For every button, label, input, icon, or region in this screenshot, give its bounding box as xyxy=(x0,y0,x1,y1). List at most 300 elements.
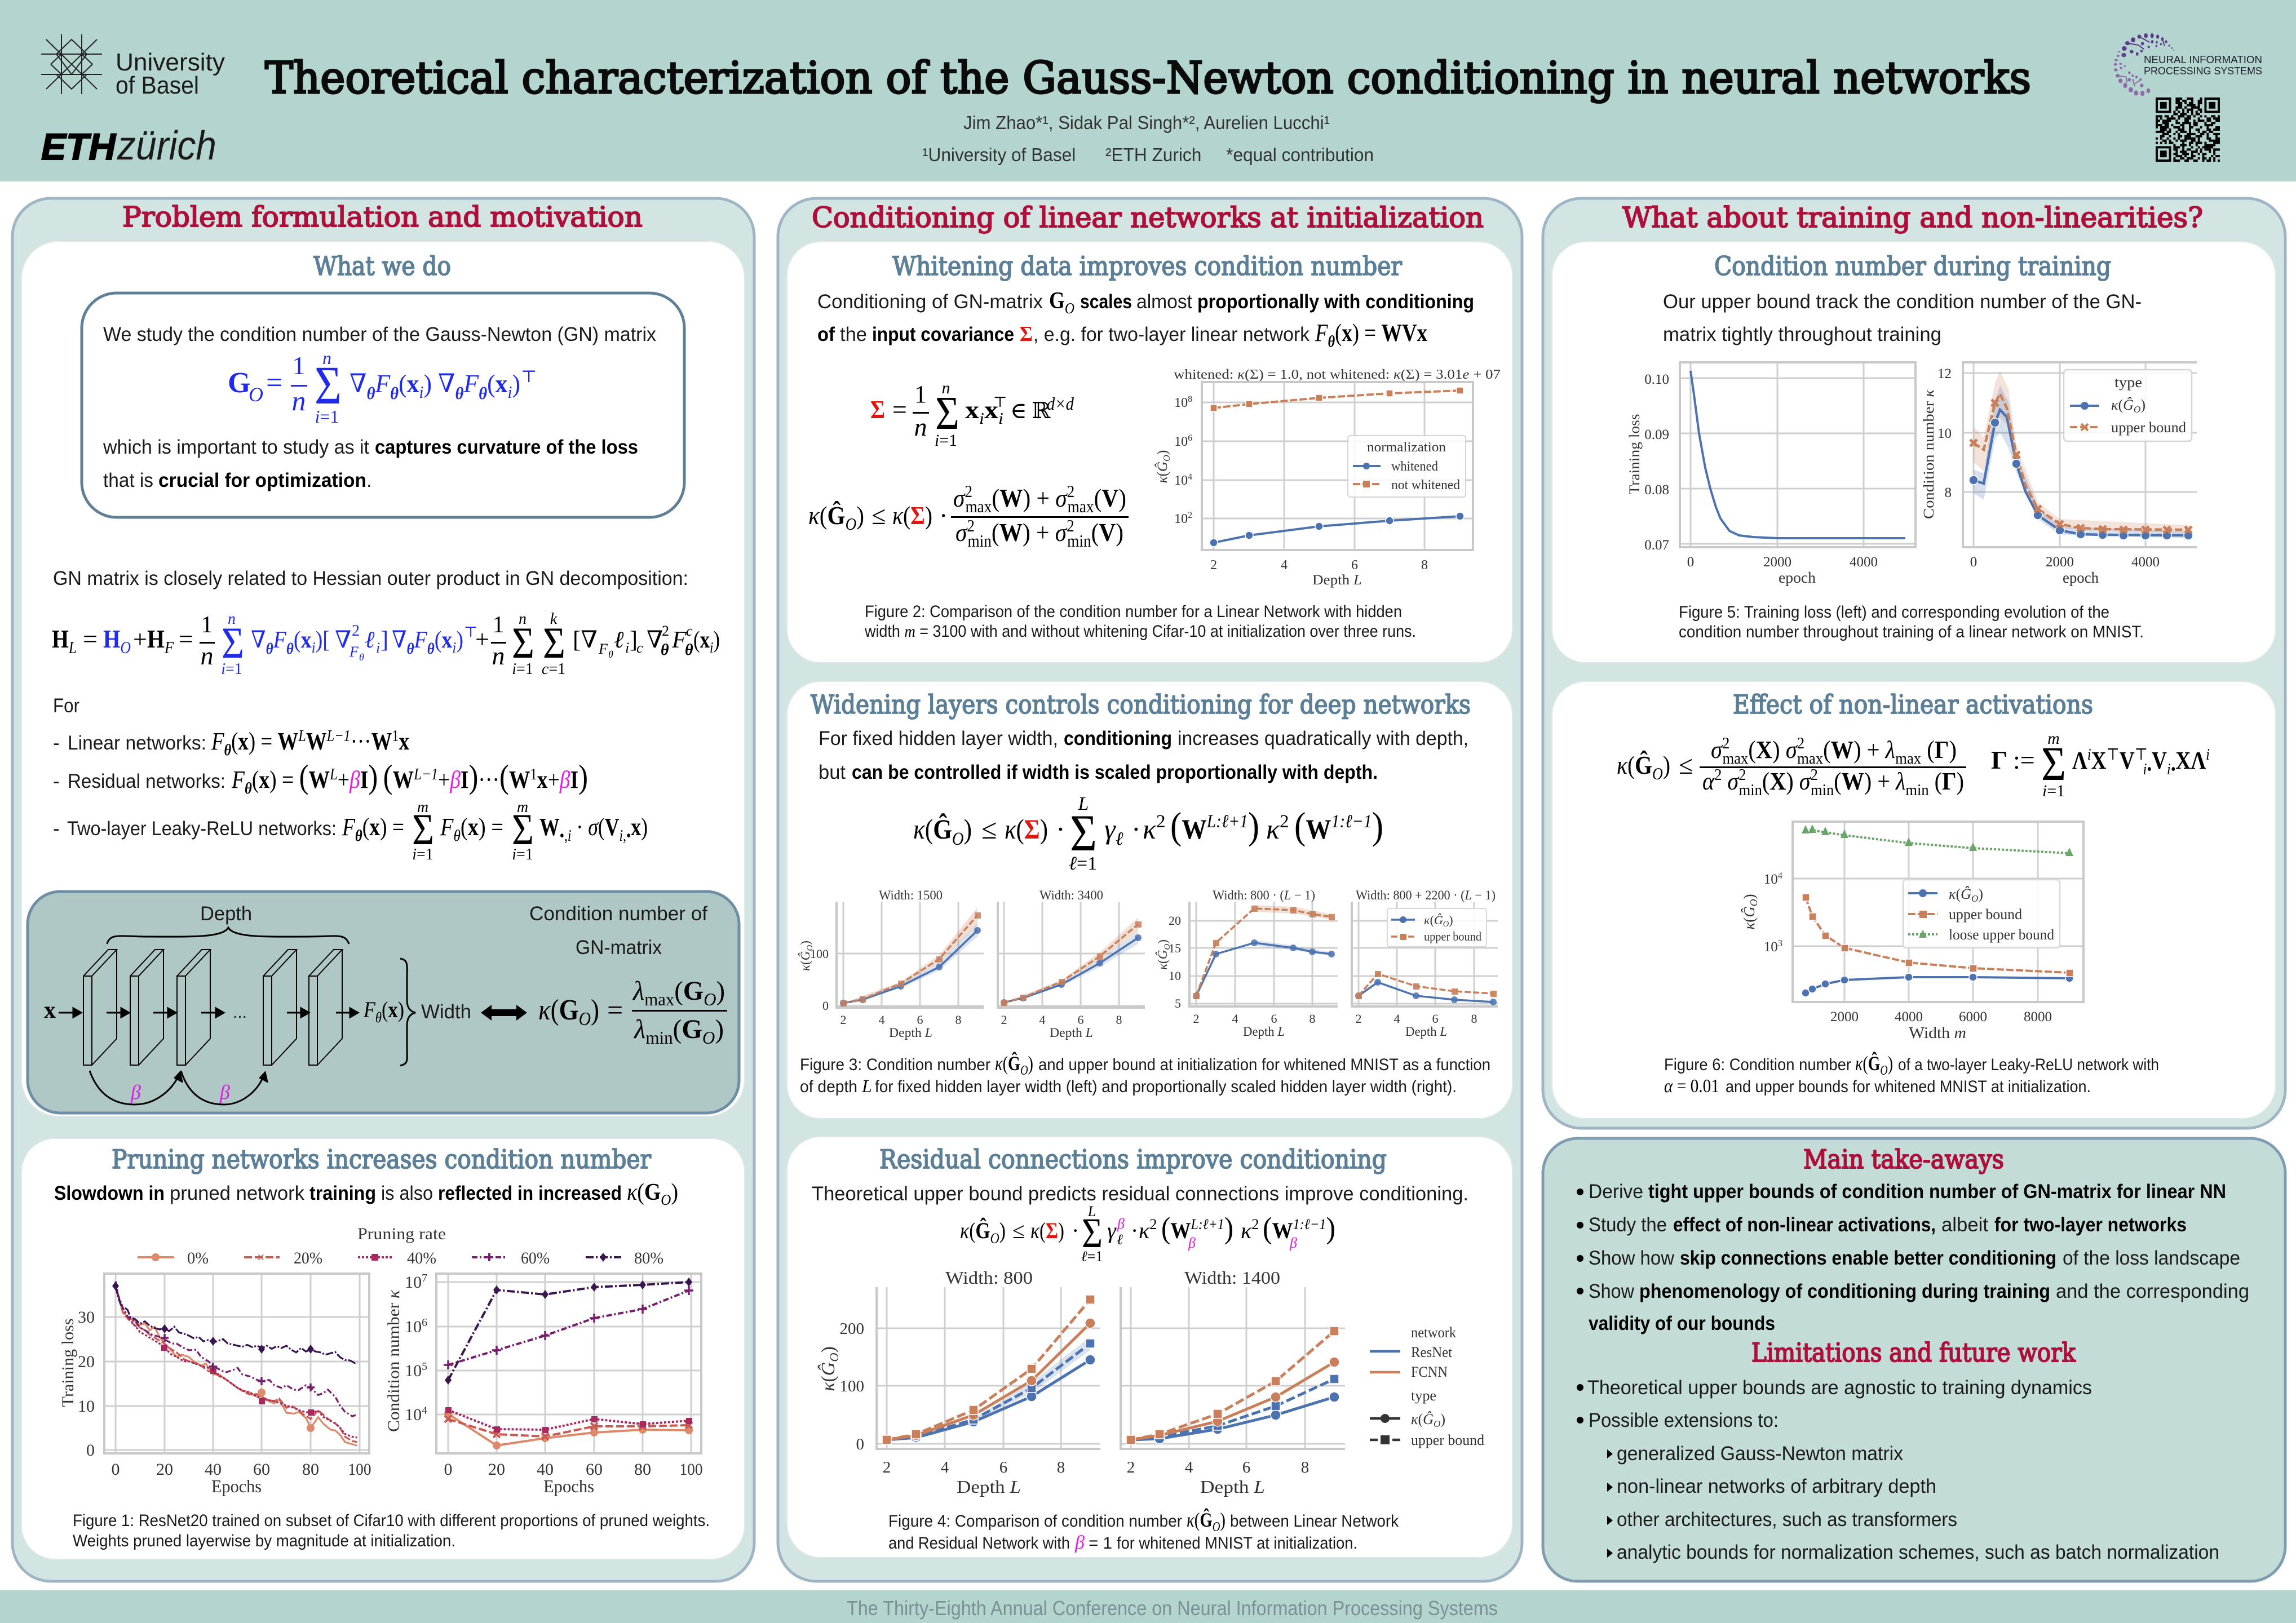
list: main take-aways: Show xyxy=(1589,1280,1635,1302)
chart: width 1500: 8 xyxy=(955,1013,962,1027)
text: network types list: •,i xyxy=(560,827,572,845)
formula: non-linear bound: ≤ xyxy=(1679,751,1693,779)
caption: figure 3: Figure 3: Condition number xyxy=(800,1056,990,1074)
formula: residual bound: L:ℓ+1 xyxy=(1191,1216,1224,1232)
caption: figure 6: κ(Ĝ xyxy=(1855,1052,1884,1075)
formula: G_O: i=1 xyxy=(315,406,339,427)
chart: width 3400: Width: 3400 xyxy=(1039,888,1103,902)
formula: depth bound: 2 xyxy=(1280,812,1289,832)
card heading: What we do xyxy=(313,251,451,281)
chart: residual width 800: 2 xyxy=(883,1458,891,1476)
caption: figure 4: Figure 4: Comparison of condition number xyxy=(888,1512,1182,1531)
formula: input covariance: x xyxy=(965,396,979,424)
text: whitening statement: almost xyxy=(1136,291,1192,313)
formula: whitening bound: max xyxy=(965,497,992,516)
formula: whitening bound: ≤ xyxy=(871,501,886,530)
card: widening layers xyxy=(787,681,1512,1119)
formula: condition number: = xyxy=(607,994,623,1026)
formula: G_O: = xyxy=(266,367,282,399)
markers: residual width 800 xyxy=(882,1295,1095,1444)
list: limitations and future work: Possible extensions to: xyxy=(1589,1409,1779,1431)
axis labels: pruning training loss: 0 xyxy=(86,1441,95,1460)
legend: residual charts: ResNet xyxy=(1411,1344,1453,1360)
text: network types list: m xyxy=(517,799,528,816)
legend: residual charts: network xyxy=(1411,1324,1456,1341)
text: network types list: L xyxy=(298,727,306,745)
text: network types list: Linear networks: xyxy=(68,732,206,754)
chart: width 3400: 4 xyxy=(1039,1013,1045,1027)
formula: whitening bound: σ xyxy=(955,518,968,547)
formula: G_O: n xyxy=(322,348,331,368)
formula: depth bound: ) xyxy=(964,813,972,845)
chart: width scaled 800 plus 2200: 4 xyxy=(1393,1012,1400,1026)
formula: G_O: ( xyxy=(487,369,496,398)
formula: G_O: θ xyxy=(455,384,464,403)
text: network types list: · xyxy=(571,813,588,841)
formula: residual bound: L xyxy=(1087,1203,1096,1220)
caption: figure 5 xyxy=(1679,603,2144,641)
legend: normalization: normalization xyxy=(1367,440,1446,455)
formula: Hessian decomposition: ∇ xyxy=(392,627,408,653)
formula: Hessian decomposition: H xyxy=(147,624,165,653)
text: network types list: βI)···(W xyxy=(450,758,534,795)
title: Theoretical characterization of the Gauss-Newton conditioning in neural networks xyxy=(265,53,2031,104)
chart: non-linear activations xyxy=(1741,822,2083,1042)
axis labels: pruning condition number: Epochs xyxy=(543,1476,594,1496)
text: network types list: θ xyxy=(224,741,231,759)
chart: residual width 1400: 6 xyxy=(1242,1458,1250,1476)
markers: non-linear activations xyxy=(1802,824,2073,997)
footer xyxy=(0,1590,2296,1623)
chart: width scaled 800 plus 2200: 6 xyxy=(1432,1012,1439,1026)
chart: non-linear activations: κ(Ĝ xyxy=(1741,906,1758,930)
chart: non-linear activations: O xyxy=(1748,899,1759,906)
chart legend: pruning rate: 60% xyxy=(521,1249,550,1267)
legend: type: ) xyxy=(2140,397,2145,413)
formula: condition number: min xyxy=(645,1028,673,1048)
text: network types list: L−1 xyxy=(413,765,438,783)
formula: whitening bound: min xyxy=(1067,531,1091,551)
legend: residual charts: FCNN xyxy=(1411,1364,1448,1380)
formula: non-linear bound: 2 xyxy=(1811,766,1818,784)
axis labels: whitening chart: O xyxy=(1161,455,1172,462)
legend: bounds: upper bound xyxy=(1949,906,2022,923)
logo: NeurIPS: NEURAL INFORMATION xyxy=(2144,54,2262,65)
legend: type: O xyxy=(2134,404,2140,415)
axis labels: pruning training loss: 20 xyxy=(78,1353,95,1371)
legend: width chart: ) xyxy=(1449,913,1453,927)
list: main take-aways: effect of non-linear activations, xyxy=(1673,1214,1936,1236)
formula: depth bound: ℓ=1 xyxy=(1069,853,1097,874)
card heading: Residual connections improve conditioning xyxy=(879,1144,1387,1174)
formula: non-linear bound: min xyxy=(1905,781,1929,799)
text: whitening statement: the xyxy=(840,323,867,345)
text: network types list: L−1 xyxy=(326,727,351,745)
axis labels: whitening chart: ) xyxy=(1155,450,1170,455)
axis labels: whitening chart: 4 xyxy=(1281,558,1288,573)
formula: non-linear bound: Λ xyxy=(2072,747,2087,774)
formula: non-linear bound: Γ xyxy=(1991,746,2007,774)
formula: depth bound: L xyxy=(1078,793,1089,814)
formula: input covariance: ℝ xyxy=(1032,398,1051,423)
axis labels: pruning condition number: 4 xyxy=(422,1404,427,1417)
chart: residual width 1400: Depth L xyxy=(1200,1476,1265,1497)
formula: G_O: G xyxy=(228,367,250,399)
diagram: network depth and width xyxy=(28,892,739,1113)
text: network types list: ( xyxy=(231,728,238,755)
text: network types list: W xyxy=(371,728,392,755)
card: residual connections xyxy=(787,1137,1512,1558)
list: main take-aways: and the corresponding xyxy=(2056,1280,2249,1302)
formula: non-linear bound: α xyxy=(1702,768,1715,795)
caption: figure 4: for whitened MNIST at initialization. xyxy=(1117,1534,1357,1553)
text: network types list: +βI) xyxy=(548,758,590,795)
diagram: network depth and width: θ xyxy=(375,1009,382,1026)
chart: whitening vs depth xyxy=(1154,367,1501,588)
legend: bounds: ) xyxy=(1978,886,1983,902)
text: whitening statement: x) = WVx xyxy=(1342,319,1436,347)
logo: University of Basel xyxy=(41,34,225,99)
formula: condition number: G xyxy=(682,1014,702,1044)
legend: bounds: κ(Ĝ xyxy=(1949,886,1971,902)
formula: non-linear bound: ( xyxy=(1748,736,1756,764)
card heading: Condition number during training xyxy=(1714,251,2111,281)
list: limitations and future work: Theoretical upper bounds are agnostic to training dynamics xyxy=(1587,1377,2092,1399)
panel: problem formulation and motivation xyxy=(12,198,754,1581)
legend: width chart: upper bound xyxy=(1424,929,1481,943)
arrow: double-headed xyxy=(481,1005,527,1021)
formula: residual bound: ℓ xyxy=(1117,1231,1123,1248)
logo: ETH Zurich xyxy=(41,123,216,168)
list: limitations and future work: other architectures, such as transformers xyxy=(1617,1509,1957,1531)
diagram: network depth and width: ... xyxy=(233,1003,247,1022)
chart: non-linear activations: 4000 xyxy=(1895,1009,1923,1025)
formula: G_O: n xyxy=(292,385,306,416)
formula: non-linear bound: σ xyxy=(1711,736,1723,764)
chart legend: pruning rate xyxy=(138,1225,663,1267)
panel: conditioning of linear networks xyxy=(778,198,1522,1581)
chart: width scaled 800 xyxy=(1156,888,1338,1039)
formula: whitening bound: V) xyxy=(1099,518,1125,547)
chart: training loss: epoch xyxy=(1779,569,1816,586)
chart: width scaled 800 plus 2200: Width: 800 + 2200 · (L − 1) xyxy=(1356,888,1496,902)
chart: training loss xyxy=(1626,362,1915,586)
list: main take-aways: for two-layer networks xyxy=(1994,1214,2187,1236)
formula: non-linear bound: κ(Ĝ xyxy=(1617,751,1655,779)
text: widening statement: increases quadratically with depth, xyxy=(1178,728,1468,750)
chart: residual width 1400: 8 xyxy=(1301,1458,1309,1476)
diagram: network depth and width: x xyxy=(44,997,56,1023)
formula: Hessian decomposition: θ xyxy=(608,649,613,660)
chart: non-linear activations: Width m xyxy=(1909,1025,1966,1042)
formula: non-linear bound: ( xyxy=(1929,768,1942,795)
formula: depth bound: κ xyxy=(1266,813,1280,845)
caption: figure 6: and upper bounds for whitened MNIST at initialization. xyxy=(1726,1077,2091,1096)
caption: figure 5: condition number throughout training of a linear network on MNIST. xyxy=(1679,623,2144,641)
chart: width scaled 800 plus 2200: Depth L xyxy=(1405,1025,1447,1039)
formula: depth bound: O xyxy=(952,829,964,849)
text: network types list: - xyxy=(53,732,60,754)
formula: condition number: G xyxy=(683,976,704,1006)
diagram: network depth and width: Depth xyxy=(200,903,252,925)
caption: figure 1 xyxy=(73,1511,710,1550)
chart: width scaled 800 plus 2200: 8 xyxy=(1471,1012,1477,1026)
axis labels: pruning condition number: 80 xyxy=(634,1460,651,1479)
legend: residual charts: type xyxy=(1411,1387,1436,1404)
formula: Hessian decomposition: O xyxy=(120,638,131,657)
chart: training loss: Training loss xyxy=(1626,414,1643,495)
formula: Hessian decomposition: ∇ xyxy=(647,627,663,653)
icon: network layers xyxy=(83,950,342,1065)
axis labels: pruning condition number: 10 xyxy=(405,1362,422,1380)
diagram: network depth and width: Width xyxy=(421,1001,471,1023)
legend: type xyxy=(2064,370,2192,441)
chart: residual width 1400: Width: 1400 xyxy=(1184,1267,1280,1288)
chart: pruning training loss xyxy=(59,1274,371,1496)
formula: depth bound xyxy=(913,793,1383,874)
formula: depth bound: ) xyxy=(1372,805,1383,847)
arrows: skip connections xyxy=(90,1071,264,1105)
formula: non-linear bound: i xyxy=(2206,746,2210,764)
text: network types list: x) = (W xyxy=(259,758,333,795)
chart: non-linear activations: 10 xyxy=(1764,939,1778,955)
formula: whitening bound: ( xyxy=(992,484,999,512)
legend: width chart: κ(Ĝ xyxy=(1424,913,1443,927)
formula: non-linear bound: Γ) xyxy=(1935,736,1957,764)
axis labels: whitening chart: 10 xyxy=(1174,473,1188,488)
text: network types list: - xyxy=(53,818,60,840)
formula: condition number: κ(G xyxy=(538,994,582,1026)
chart: width scaled 800: O xyxy=(1162,944,1172,950)
formula: Hessian decomposition: θ xyxy=(359,651,364,663)
authors: Jim Zhao*¹, Sidak Pal Singh*², Aurelien Lucchi¹ xyxy=(963,112,1330,133)
formula: G_O: ⊤ xyxy=(521,367,537,386)
chart: width 1500: Depth L xyxy=(889,1026,932,1040)
text: network types list: x xyxy=(537,766,548,793)
formula: residual bound xyxy=(960,1203,1335,1265)
legend: width chart: O xyxy=(1443,920,1449,929)
card: pruning xyxy=(21,1138,745,1559)
card: whitening xyxy=(787,242,1512,663)
callout: GN matrix definition xyxy=(82,293,684,517)
formula: non-linear bound: max xyxy=(1797,750,1824,768)
caption: figure 3: L xyxy=(861,1076,872,1096)
formula: whitening bound: 2 xyxy=(967,516,975,535)
heading: limitations and future work: Limitations and future work xyxy=(1751,1337,2076,1368)
formula: Hessian decomposition: Σ xyxy=(512,618,534,667)
chart: width scaled 800: 8 xyxy=(1309,1012,1316,1026)
formula: condition number: O xyxy=(704,990,716,1009)
chart legend: pruning rate: × xyxy=(257,1250,265,1265)
formula: whitening bound: 2 xyxy=(1067,516,1074,535)
list: main take-aways: Derive xyxy=(1589,1181,1643,1203)
chart: whitening vs depth: whitened: κ(Σ) = 1.0, not whitened: κ(Σ) = 3.01 e + 07 xyxy=(1174,367,1501,382)
legend: bounds xyxy=(1903,880,2060,948)
text: network types list: x) = W xyxy=(238,728,302,755)
caption: figure 5: Figure 5: Training loss (left) and corresponding evolution of the xyxy=(1679,603,2109,622)
formula: non-linear bound: ( xyxy=(1823,736,1831,764)
text: residual statement: Theoretical upper bound predicts residual connections improve conditioning. xyxy=(812,1183,1468,1205)
formula: residual bound: Σ xyxy=(1082,1210,1103,1257)
legend: type: upper bound xyxy=(2111,419,2186,436)
caption: figure 4: = 1 xyxy=(1089,1534,1112,1553)
chart: residual width 1400: 2 xyxy=(1127,1458,1135,1476)
formula: Hessian decomposition: i xyxy=(625,640,629,656)
axis labels: pruning condition number: 60 xyxy=(586,1460,603,1479)
callout: GN matrix definition: crucial for optimization xyxy=(158,469,366,491)
chart: residual width 800: 8 xyxy=(1057,1458,1065,1476)
formula: input covariance: Σ xyxy=(935,387,959,440)
formula: input covariance: ⊤ xyxy=(993,394,1007,410)
axis labels: pruning condition number xyxy=(384,1272,702,1496)
chart: residual width 800: Width: 800 xyxy=(945,1267,1033,1288)
axis labels: pruning condition number: 5 xyxy=(422,1360,427,1373)
formula: non-linear bound: i• xyxy=(2143,760,2152,778)
chart: width 3400: 8 xyxy=(1116,1013,1122,1027)
logo: University of Basel: University xyxy=(116,48,225,76)
text: whitening statement: θ xyxy=(1328,332,1335,351)
formula: Hessian decomposition: n xyxy=(201,641,213,670)
caption: figure 1: Weights pruned layerwise by magnitude at initialization. xyxy=(73,1532,455,1550)
legend: residual charts xyxy=(1370,1324,1484,1448)
text: widening statement: can be controlled if width is scaled proportionally with depth. xyxy=(852,761,1378,783)
logo: NeurIPS: PROCESSING SYSTEMS xyxy=(2144,65,2262,77)
caption: figure 6 xyxy=(1664,1052,2159,1097)
formula: whitening bound: ( xyxy=(992,518,999,547)
formula: Hessian decomposition: 1 xyxy=(493,612,504,638)
logo: ETH Zurich: ETH xyxy=(41,126,116,167)
list: main take-aways: tight upper bounds of condition number of GN-matrix for linear NN xyxy=(1648,1181,2226,1203)
formula: non-linear bound: i• xyxy=(2167,760,2175,778)
caption: figure 3: ) xyxy=(1028,1052,1033,1075)
formula: Hessian decomposition: F xyxy=(598,641,608,657)
legend: type: κ(Ĝ xyxy=(2111,397,2134,413)
formula: residual bound: κ(Ĝ xyxy=(960,1218,993,1243)
chart: width scaled 800: 20 xyxy=(1169,914,1181,928)
chart: non-linear activations: ) xyxy=(1741,894,1758,899)
axis labels: whitening chart: 6 xyxy=(1188,433,1192,443)
text: network types list: Residual networks: xyxy=(68,770,225,792)
chart: width 1500: O xyxy=(805,945,815,951)
caption: figure 6: Figure 6: Condition number xyxy=(1664,1056,1851,1074)
text: network types list: i,• xyxy=(620,827,633,845)
formula: G_O: ) xyxy=(423,369,432,398)
formula: Hessian decomposition: ℓ xyxy=(614,627,624,653)
formula: Hessian decomposition: i xyxy=(452,638,456,656)
diagram: network depth and width: F xyxy=(363,997,375,1022)
formula: G_O: F xyxy=(374,369,391,398)
formula: condition number: λ xyxy=(632,976,644,1006)
chart: residual width 800: O xyxy=(827,1353,841,1362)
axis labels: pruning training loss xyxy=(59,1308,371,1496)
axis labels: pruning condition number: 10 xyxy=(405,1273,422,1292)
chart: width 3400: 2 xyxy=(1001,1013,1007,1027)
formula: Hessian decomposition: 2 xyxy=(352,622,360,640)
text: network types list: θ xyxy=(453,827,461,845)
legend: bounds: loose upper bound xyxy=(1949,926,2054,943)
text: network types list: ( xyxy=(252,766,259,793)
legend: residual charts: O xyxy=(1434,1418,1440,1429)
text: network types list: ( xyxy=(362,813,369,841)
chart: width scaled 800: 2 xyxy=(1193,1012,1200,1026)
formula: condition number: ( xyxy=(674,976,683,1006)
chart legend: pruning rate: 20% xyxy=(294,1249,322,1267)
card: effect of non-linear activations xyxy=(1552,681,2276,1119)
formula: depth bound: · xyxy=(1131,813,1141,845)
formula: Hessian decomposition: + xyxy=(475,626,489,653)
formula: residual bound: 2 xyxy=(1149,1216,1157,1232)
caption: figure 4: O xyxy=(1213,1520,1220,1535)
formula: whitening bound: κ(Ĝ xyxy=(808,501,847,530)
caption: figure 6: ) xyxy=(1888,1052,1893,1075)
formula: Hessian decomposition: n xyxy=(519,610,527,628)
formula: whitening bound: ) xyxy=(856,501,864,530)
formula: whitening bound: 2 xyxy=(965,482,972,501)
formula: depth bound: γ xyxy=(1104,813,1116,845)
formula: Hessian decomposition: H xyxy=(103,624,121,653)
formula: Hessian decomposition: c xyxy=(636,640,643,656)
text: network types list: x xyxy=(631,813,641,841)
chart: width 1500: 6 xyxy=(917,1013,923,1027)
formula: depth bound: κ xyxy=(1143,813,1157,845)
formula: non-linear bound: 2 xyxy=(1722,734,1729,752)
text: network types list: W xyxy=(306,728,327,755)
formula: depth bound: ) xyxy=(1248,805,1259,847)
formula: input covariance: Σ xyxy=(870,395,885,424)
caption: figure 3 xyxy=(800,1052,1490,1096)
formula: condition number: ) xyxy=(591,994,599,1026)
affiliations: ¹University of Basel ²ETH Zurich *equal contribution xyxy=(922,144,1374,165)
formula: Hessian decomposition: ℓ xyxy=(365,627,375,653)
formula: non-linear bound: min xyxy=(1739,781,1762,799)
list: main take-aways xyxy=(1577,1181,2249,1334)
text: network types list: βI) (W xyxy=(350,758,418,795)
text: widening statement: but xyxy=(819,761,846,783)
caption: figure 4: ) xyxy=(1220,1509,1226,1531)
caption: figure 3: and upper bound at initialization for whitened MNIST as a function xyxy=(1038,1056,1490,1074)
formula: Hessian decomposition: F xyxy=(349,644,359,660)
formula: whitening bound: W) + σ xyxy=(999,518,1068,547)
formula: non-linear bound: W) + λ xyxy=(1831,736,1896,764)
formula: Hessian decomposition xyxy=(52,610,720,678)
chart legend: pruning rate: 40% xyxy=(407,1249,436,1267)
text: network types list: F xyxy=(211,728,224,755)
formula: non-linear bound: X xyxy=(2091,747,2107,774)
formula: non-linear bound: W) + λ xyxy=(1842,768,1906,795)
caption: figure 6: O xyxy=(1880,1063,1888,1078)
formula: whitening bound: W) + σ xyxy=(999,484,1068,512)
formula: non-linear bound: ( xyxy=(1762,768,1769,795)
formula: G_O: ) xyxy=(512,369,520,398)
formula: G_O: 1 xyxy=(292,351,306,380)
legend: type: type xyxy=(2114,374,2142,391)
text: network types list: L xyxy=(329,765,338,783)
chart: training loss: 0.08 xyxy=(1644,482,1669,498)
chart: width scaled 800: 4 xyxy=(1232,1012,1238,1026)
formula: G_O: θ xyxy=(390,384,399,403)
chart legend: pruning rate: Pruning rate xyxy=(357,1225,446,1243)
chart: width scaled 800 plus 2200: 2 xyxy=(1355,1012,1362,1026)
formula: whitening bound: max xyxy=(1068,497,1094,516)
formula: non-linear bound: m xyxy=(2047,729,2060,748)
formula: condition number: O xyxy=(579,1008,591,1030)
text: whitening statement: scales xyxy=(1080,291,1132,313)
text: network types list: m xyxy=(417,799,428,816)
chart: condition number during training: 10 xyxy=(1937,426,1952,441)
formula: whitening bound: min xyxy=(967,531,992,551)
formula: Hessian decomposition: ∇ xyxy=(335,627,351,653)
axis labels: whitening chart: 6 xyxy=(1351,558,1358,573)
